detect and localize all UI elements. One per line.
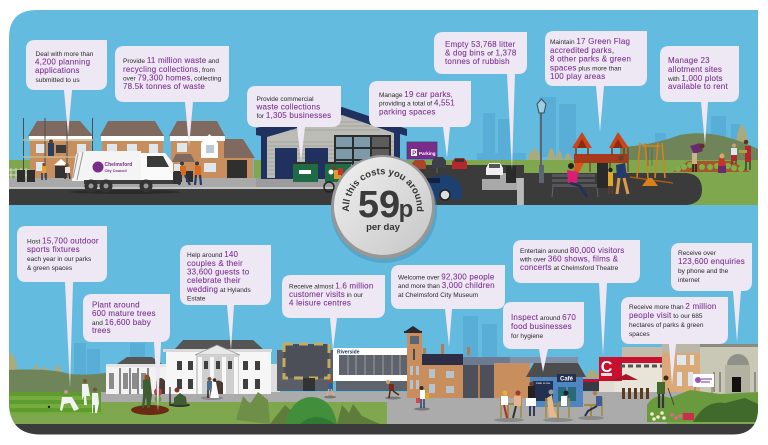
callout: waste collections: [115, 46, 229, 147]
callout: theatre: with over 360 shows, films &: [519, 254, 619, 264]
striped bowling green: [9, 392, 104, 415]
cyclist: [324, 166, 343, 192]
callout: commercial waste: [247, 86, 341, 162]
callout: sports fixtures: each year in our parks: [27, 256, 92, 263]
parking sign: P: [412, 151, 416, 157]
callout: sports fixtures: & green spaces: [27, 265, 73, 272]
family on bench: [552, 155, 628, 197]
callout: trees: 600 mature trees: [92, 309, 156, 318]
callout: weddings: couples & their: [187, 259, 243, 268]
callout: theatre: Entertain around 80,000 visitors: [520, 246, 624, 255]
Riverside leisure centre: Riverside: [337, 350, 360, 356]
callout: allotments: allotment sites: [668, 65, 722, 74]
fence: [9, 168, 30, 178]
callout: trees: [83, 294, 170, 412]
callout: weddings: Estate: [187, 296, 206, 302]
callout: enquiries: by phone and the: [678, 268, 729, 275]
callout: park visitors: Receive more than 2 million: [629, 302, 717, 311]
callout: parks: accredited parks,: [550, 46, 614, 55]
callout: parks: 100 play areas: [550, 72, 605, 81]
Chelmsford Museum and Oaklands buildings: [662, 344, 758, 395]
callout: city museum: and more than 3,000 children: [398, 281, 495, 290]
callout: allotments: with 1,000 plots: [667, 74, 723, 83]
callout: sports fixtures: sports fixtures: [27, 245, 80, 254]
Chelmsford Theatre: [583, 347, 662, 399]
parked cars: [412, 157, 503, 200]
refuse truck: [70, 151, 181, 194]
left hills: [9, 353, 106, 392]
callout: food businesses: for hygiene: [511, 333, 544, 340]
badge: 59p per day: All this costs you around: [342, 168, 424, 212]
callout: car parks: parking spaces: [379, 108, 436, 116]
callout: planning applications: Deal with more than: [36, 51, 94, 58]
warehouse: [256, 107, 407, 179]
street lamp: [537, 99, 546, 183]
callout: food businesses: food businesses: [511, 322, 572, 331]
callout: commercial waste: Provide commercial: [256, 96, 314, 103]
callout: parks: 8 other parks & green: [550, 54, 631, 64]
badge: 59p per day: [331, 155, 437, 263]
callout: litter bins: [434, 32, 527, 170]
tree planters: [131, 374, 190, 415]
Hylands House: [106, 340, 280, 394]
shopper: [414, 386, 430, 410]
house with scaffolding: [23, 118, 93, 178]
callout: waste collections: 78.5k tonnes of waste: [123, 82, 205, 91]
callout: commercial waste: waste collections: [256, 102, 320, 112]
callout: allotments: [660, 46, 739, 145]
callout: enquiries: Receive over: [678, 250, 717, 257]
workers: [42, 162, 201, 185]
cafe: Café: [560, 376, 574, 382]
wedding couple: [201, 377, 223, 400]
callout: waste collections: over 79,300 homes, collecting: [123, 74, 222, 82]
callout: city museum: at Chelmsford City Museum: [398, 292, 478, 299]
outdoor diners and waiter: [494, 382, 604, 422]
joggers: [324, 379, 401, 400]
callout: commercial waste: for 1,305 businesses: [256, 111, 331, 120]
cafe: [526, 363, 586, 407]
callout: weddings: [180, 245, 271, 350]
callout: enquiries: 123,600 enquiries: [678, 257, 745, 266]
callout: litter bins: & dog bins of 1,378: [445, 48, 517, 58]
callout: city museum: Welcome over 92,300 people: [398, 272, 495, 282]
callout: litter bins: tonnes of rubbish: [445, 57, 510, 66]
grass: [9, 160, 758, 205]
callout: sports fixtures: [17, 226, 107, 388]
callout: park visitors: people visit to our 685: [629, 311, 703, 320]
bottom street scene: [9, 316, 758, 435]
cafe: Cafe to Go: [536, 381, 551, 385]
callout: planning applications: 4,200 planning: [35, 58, 90, 66]
callout: trees: trees: [92, 326, 111, 335]
callout: car parks: providing a total of 4,551: [379, 98, 455, 108]
callout: food businesses: [503, 302, 584, 372]
callout: allotments: available to rent: [668, 82, 728, 91]
callout: allotments: Manage 23: [668, 56, 710, 65]
callout: car parks: Manage 19 car parks,: [379, 90, 453, 99]
callout: park visitors: [621, 297, 728, 385]
commercial waste bins: [292, 162, 352, 182]
Chelmsford Theatre: C: [601, 359, 613, 376]
lawn and ground: [9, 392, 758, 435]
Riverside leisure centre: [277, 344, 407, 391]
bowlers: [48, 379, 99, 413]
callout: parks: Maintain 17 Green Flag: [550, 37, 630, 46]
badge: 59p per day: p: [399, 196, 413, 223]
callout: planning applications: [26, 40, 107, 135]
callout: sports fixtures: Host 15,700 outdoor: [27, 236, 99, 246]
top street scene: [9, 97, 758, 205]
callout: leisure centres: customer visits in our: [289, 290, 364, 299]
callout: planning applications: submitted to us: [36, 77, 80, 84]
callout: food businesses: Inspect around 670: [511, 313, 576, 322]
parking sign: Parking: [419, 151, 436, 156]
callout: enquiries: internet: [678, 277, 700, 284]
callout: weddings: 33,600 guests to: [187, 268, 250, 276]
callout: leisure centres: 4 leisure centres: [289, 298, 351, 308]
refuse truck: City Council: [104, 169, 127, 173]
callout: waste collections: recycling collections, from: [123, 65, 215, 74]
callout: weddings: Help around 140: [187, 250, 239, 259]
callout: parks: [545, 31, 647, 132]
callout: theatre: [513, 240, 640, 356]
pavement and road: [9, 165, 702, 205]
callout: litter bins: Empty 53,768 litter: [445, 40, 516, 49]
badge: 59p per day: 59: [358, 184, 400, 226]
refuse truck: Chelmsford: [104, 162, 132, 168]
callout: weddings: wedding at Hylands: [186, 285, 251, 294]
callout: trees: Plant around: [92, 300, 140, 310]
right tan hill: [585, 370, 600, 378]
callout: planning applications: applications: [35, 66, 80, 75]
gardener and flower garden: [647, 376, 758, 422]
wheelie bins: [17, 170, 193, 182]
callout: leisure centres: Receive almost 1.6 million: [289, 282, 373, 290]
detached house and garage: [169, 121, 255, 178]
hills and bushes: [527, 125, 758, 160]
callout: enquiries: [671, 243, 752, 342]
parking sign: [407, 142, 438, 173]
lawn bushes: [236, 392, 380, 424]
callout: waste collections: Provide 11 million waste and: [123, 56, 219, 65]
playground: [572, 132, 673, 186]
litter bin: [506, 166, 516, 183]
bottom skyline: [74, 316, 497, 374]
middle house: [100, 121, 164, 153]
callout: parks: spaces plus more than: [550, 64, 622, 72]
callout: city museum: [391, 265, 505, 347]
allotment: [673, 140, 751, 173]
callout: park visitors: spaces: [629, 331, 650, 338]
callout: weddings: celebrate their: [187, 276, 241, 285]
callout: car parks: [369, 81, 471, 158]
City Museum: [404, 326, 578, 398]
callout: leisure centres: [282, 275, 385, 350]
callout: theatre: concerts at Chelmsford Theatre: [520, 263, 619, 272]
distant city skyline: [477, 97, 740, 161]
badge: 59p per day: per day: [366, 222, 401, 233]
callout: trees: and 16,600 baby: [92, 318, 151, 327]
callout: park visitors: hectares of parks & green: [629, 322, 704, 329]
